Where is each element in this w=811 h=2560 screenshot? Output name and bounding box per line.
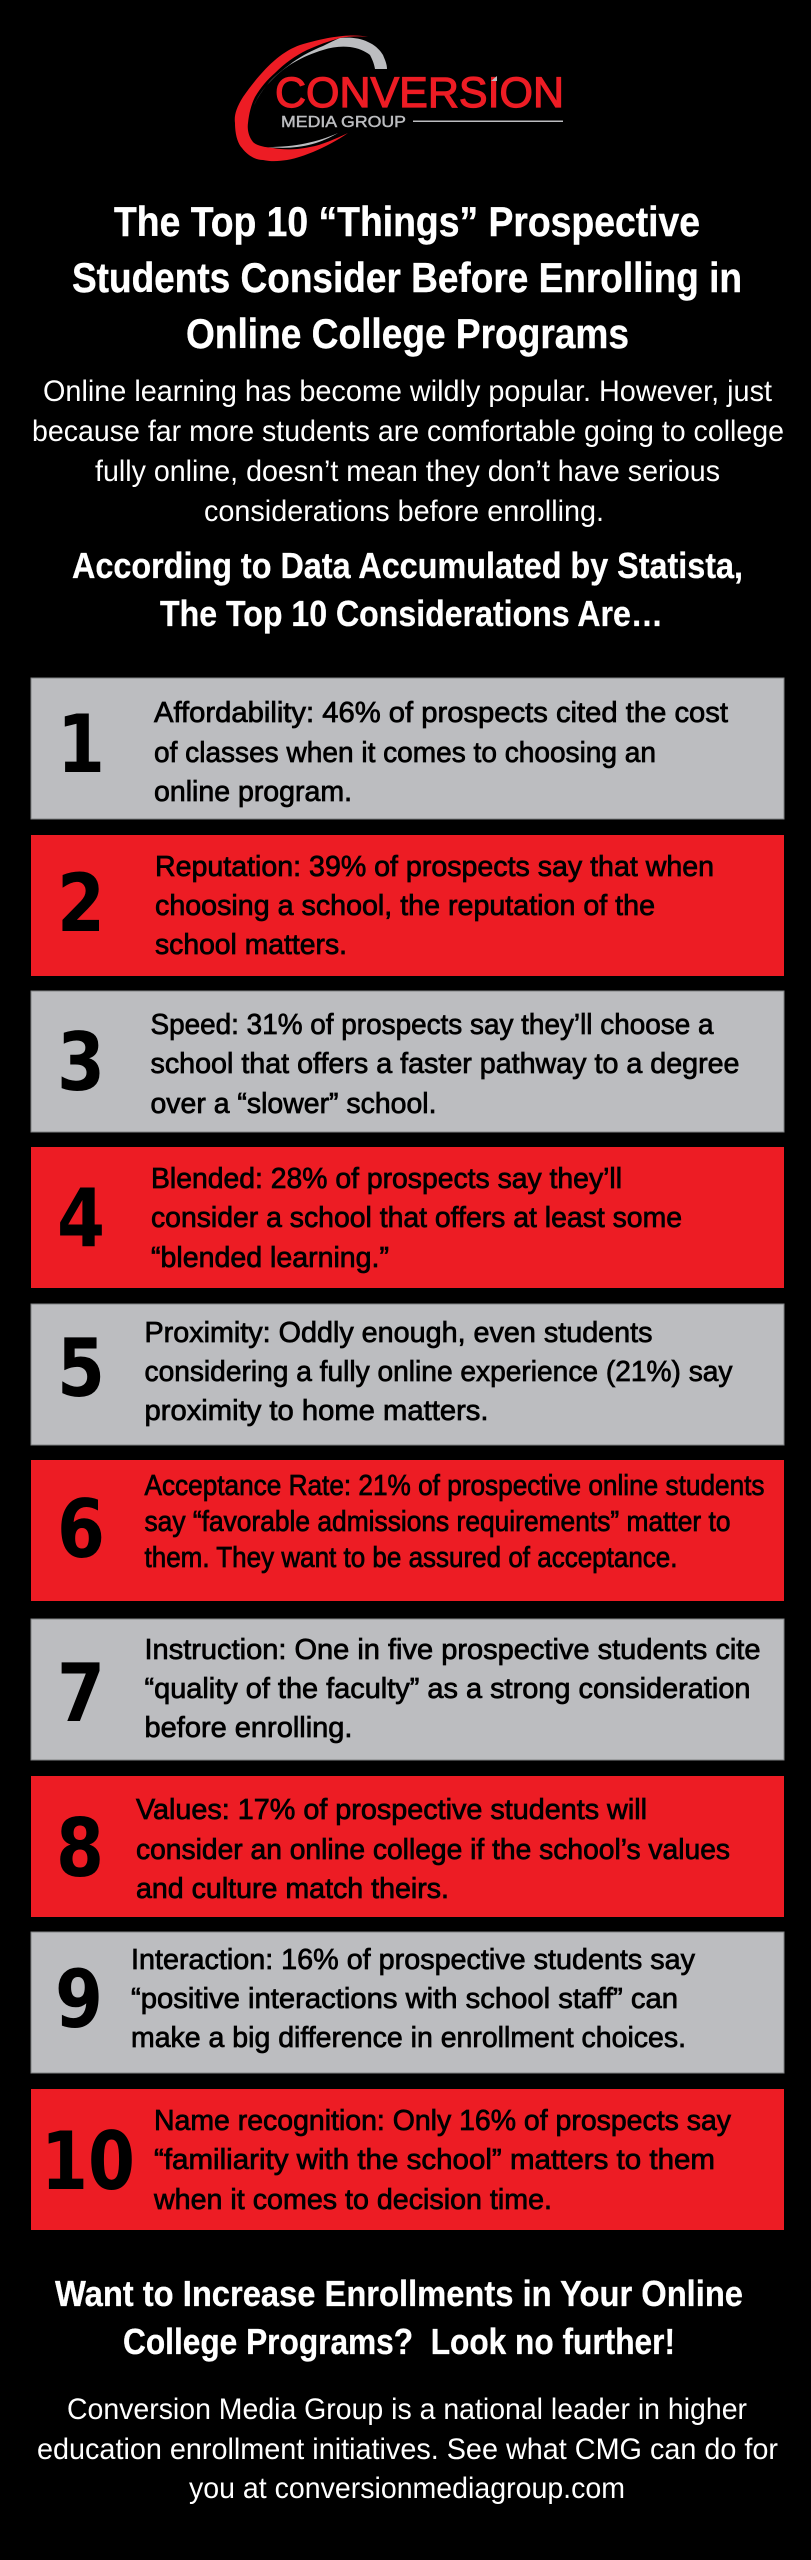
panel 4 text — [151, 1163, 682, 1274]
panel 6: acceptance rate — [31, 1460, 784, 1601]
panel 3 background — [31, 991, 784, 1132]
panel 1 text: Affordability: 46% of prospects cited the cost — [154, 697, 728, 729]
panel 5 text: proximity to home matters. — [144, 1395, 488, 1427]
panel 9 text: “positive interactions with school staff” can — [131, 1983, 678, 2015]
title: Students Consider Before Enrolling in — [72, 254, 742, 301]
panel 2: reputation — [31, 835, 784, 976]
panel 10 text — [153, 2105, 732, 2216]
logo: Conversion Media Group — [235, 36, 564, 161]
panel 2 text — [155, 851, 714, 961]
number 5: 5 — [57, 1322, 105, 1415]
logo grey swoosh — [252, 38, 387, 110]
panel 1 text — [154, 697, 728, 808]
call to action heading — [55, 2273, 743, 2362]
intro paragraph: fully online, doesn’t mean they don’t have serious — [95, 455, 720, 488]
panel 8: values — [31, 1776, 784, 1917]
panel 6 text — [144, 1470, 764, 1574]
intro paragraph — [32, 375, 784, 528]
panel 10 background — [31, 2089, 784, 2230]
panel 10 text: “familiarity with the school” matters to them — [154, 2144, 715, 2176]
panel 6 background — [31, 1460, 784, 1601]
panel 8 text — [136, 1794, 730, 1905]
logo wordmark: CONVERSION — [275, 69, 564, 117]
logo i accent — [491, 76, 497, 81]
logo grey lower accent — [268, 133, 338, 148]
panel 8 background — [31, 1776, 784, 1917]
panel 10 text: Name recognition: Only 16% of prospects say — [154, 2105, 732, 2137]
panel 7 text: Instruction: One in five prospective students cite — [144, 1634, 760, 1666]
title — [72, 198, 742, 357]
call to action heading: College Programs? Look no further! — [123, 2321, 675, 2362]
title: Online College Programs — [186, 310, 629, 357]
closing paragraph: Conversion Media Group is a national leader in higher — [67, 2393, 747, 2426]
panel 4 background — [31, 1147, 784, 1288]
panel 8 text: consider an online college if the school’s values — [136, 1834, 730, 1866]
panel 10 text: when it comes to decision time. — [153, 2184, 552, 2216]
intro paragraph: Online learning has become wildly popular. However, just — [43, 375, 773, 408]
panel 3: speed — [31, 991, 784, 1132]
panel 9 text: Interaction: 16% of prospective students say — [131, 1944, 696, 1976]
closing paragraph: you at conversionmediagroup.com — [189, 2472, 625, 2505]
panel 7: instruction — [31, 1619, 784, 1760]
panel 3 text: over a “slower” school. — [150, 1088, 436, 1120]
panel 2 text: choosing a school, the reputation of the — [155, 890, 655, 922]
number 9: 9 — [55, 1953, 103, 2046]
panel 3 text — [150, 1009, 740, 1120]
number 10: 10 — [41, 2115, 135, 2208]
panel 7 text: “quality of the faculty” as a strong consideration — [144, 1673, 750, 1705]
logo red swoosh — [235, 36, 368, 161]
number 1: 1 — [57, 698, 105, 791]
panel 3 text: school that offers a faster pathway to a degree — [150, 1048, 740, 1080]
panel 4 text: consider a school that offers at least some — [151, 1202, 682, 1234]
number 4: 4 — [57, 1172, 105, 1265]
panel 3 text: Speed: 31% of prospects say they’ll choose a — [150, 1009, 714, 1041]
panel 8 text: and culture match theirs. — [136, 1873, 449, 1905]
panel 2 text: school matters. — [155, 929, 347, 961]
panel 1 text: online program. — [154, 776, 352, 808]
subheading: According to Data Accumulated by Statista, — [72, 545, 743, 586]
panel 5 text: Proximity: Oddly enough, even students — [144, 1317, 652, 1349]
closing paragraph — [37, 2393, 778, 2505]
number 7: 7 — [57, 1647, 105, 1740]
panel 7 text — [144, 1634, 760, 1744]
panel 1: affordability — [31, 678, 784, 819]
panel 4: blended — [31, 1147, 784, 1288]
panel 6 text: say “favorable admissions requirements” matter to — [144, 1506, 730, 1538]
panel 5 background — [31, 1304, 784, 1445]
panel 8 text: Values: 17% of prospective students will — [136, 1794, 647, 1826]
panel 9 text: make a big difference in enrollment choices. — [131, 2022, 686, 2054]
panel 10: name recognition — [31, 2089, 784, 2230]
subheading — [72, 545, 743, 634]
subheading: The Top 10 Considerations Are… — [160, 593, 663, 634]
intro paragraph: because far more students are comfortable going to college — [32, 415, 784, 448]
panel 7 text: before enrolling. — [144, 1712, 352, 1744]
panel 9: interaction — [31, 1932, 784, 2073]
panel 1 text: of classes when it comes to choosing an — [154, 737, 656, 769]
number 3: 3 — [57, 1016, 105, 1109]
panel 7 background — [31, 1619, 784, 1760]
panel 4 text: “blended learning.” — [151, 1242, 389, 1274]
number 8: 8 — [56, 1802, 104, 1895]
panel 5: proximity — [31, 1304, 784, 1445]
panel 9 text — [131, 1944, 696, 2054]
closing paragraph: education enrollment initiatives. See what CMG can do for — [37, 2433, 778, 2466]
number 6: 6 — [57, 1483, 105, 1576]
panel 6 text: Acceptance Rate: 21% of prospective online students — [144, 1470, 764, 1502]
number 2: 2 — [57, 857, 105, 950]
panel 5 text — [144, 1317, 733, 1427]
title: The Top 10 “Things” Prospective — [114, 198, 700, 245]
logo rule — [413, 120, 563, 122]
panel 5 text: considering a fully online experience (21%) say — [144, 1356, 733, 1388]
panel 9 background — [31, 1932, 784, 2073]
panel 1 background — [31, 678, 784, 819]
panel 6 text: them. They want to be assured of acceptance. — [144, 1542, 678, 1574]
intro paragraph: considerations before enrolling. — [204, 495, 604, 528]
panel 2 background — [31, 835, 784, 976]
call to action heading: Want to Increase Enrollments in Your Online — [55, 2273, 743, 2314]
panel 4 text: Blended: 28% of prospects say they’ll — [151, 1163, 622, 1195]
logo subtitle: MEDIA GROUP — [281, 114, 406, 131]
panel 2 text: Reputation: 39% of prospects say that when — [155, 851, 714, 883]
